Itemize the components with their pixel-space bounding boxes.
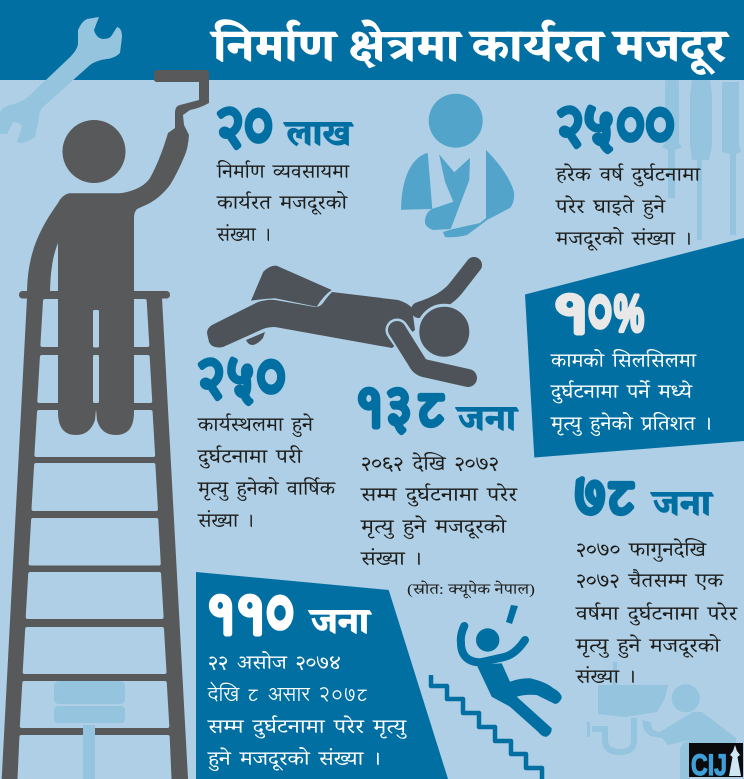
stat: 20 lakh: निर्माण व्यवसायमा bbox=[216, 159, 350, 183]
stat: 138 people: जना bbox=[455, 398, 519, 438]
stat: 138 people bbox=[353, 379, 519, 570]
stat: 20 lakh: लाख bbox=[283, 113, 354, 153]
stat: 110 people: सम्म दुर्घटनामा परेर मृत्यु bbox=[207, 714, 407, 740]
stat: 110 people: हुने मजदूरको संख्या । bbox=[207, 746, 381, 771]
stat: 250 bbox=[195, 338, 337, 532]
leg gap details bbox=[93, 310, 99, 403]
icon: fallen worker bbox=[207, 265, 474, 378]
icon: falling worker bbox=[431, 605, 562, 779]
stat: 250: ० bbox=[254, 338, 288, 412]
stat: 20 lakh: संख्या । bbox=[216, 223, 271, 246]
icon: paint roller bbox=[54, 681, 125, 779]
stat: 10 percent: % bbox=[614, 285, 644, 343]
stat: 110 people: देखि ८ असार २०७८ bbox=[207, 681, 369, 706]
stat: 250: संख्या । bbox=[197, 509, 254, 532]
stat: 250: कार्यस्थलमा हुने bbox=[197, 412, 315, 437]
stat: 78 people: संख्या । bbox=[575, 665, 636, 688]
fallen worker head bbox=[418, 305, 471, 358]
stat: 10 percent bbox=[549, 273, 712, 437]
stat: 250: दुर्घटनामा परी bbox=[197, 445, 303, 469]
stat: 250: मृत्यु हुनेको वार्षिक bbox=[197, 476, 337, 502]
icon: painter bbox=[27, 70, 209, 435]
stat: 138 people: ३ bbox=[383, 379, 414, 437]
stat: 10 percent: १ bbox=[549, 285, 591, 343]
stat: 2500: ५ bbox=[582, 98, 617, 156]
painter head bbox=[62, 120, 126, 183]
stairs bbox=[431, 675, 542, 779]
stat: 78 people bbox=[573, 467, 739, 688]
stat: 110 people: ० bbox=[264, 574, 296, 648]
stat: 138 people: २०६२ देखि २०७२ bbox=[361, 451, 499, 475]
header banner bbox=[0, 0, 744, 80]
stat: 2500: ० bbox=[643, 86, 677, 160]
stat: 78 people: २०७२ चैतसम्म एक bbox=[576, 568, 725, 592]
painter body and roller bbox=[27, 70, 209, 298]
icon: screwdrivers bbox=[662, 80, 741, 240]
stat: 110 people bbox=[204, 574, 407, 771]
stat: 250: ५ bbox=[225, 350, 257, 408]
stat: 2500: ० bbox=[614, 86, 647, 160]
stat: 2500 bbox=[554, 86, 701, 251]
title: निर्माण क्षेत्रमा कार्यरत मजदूर bbox=[210, 19, 729, 75]
stat: 138 people: १ bbox=[353, 379, 385, 437]
stat: 10 percent: ० bbox=[586, 273, 614, 347]
stat: 78 people: जना bbox=[650, 483, 714, 523]
stat: 250: २ bbox=[195, 350, 226, 408]
stat: 78 people: ७ bbox=[573, 467, 607, 525]
panel: 10 percent bbox=[525, 238, 744, 458]
stat: 138 people: ८ bbox=[417, 379, 448, 437]
stat: 20 lakh: ० bbox=[242, 87, 275, 161]
stat: 138 people: सम्म दुर्घटनामा परेर bbox=[360, 482, 519, 507]
stat: 138 people: मृत्यु हुने मजदूरको bbox=[360, 514, 507, 540]
stat: 10 percent: कामको सिलसिलमा bbox=[550, 348, 697, 372]
stat: 138 people: संख्या । bbox=[360, 547, 422, 570]
stat: 20 lakh bbox=[214, 87, 354, 246]
stat: 2500: २ bbox=[554, 98, 585, 156]
stat: 78 people: २०७० फागुनदेखि bbox=[576, 537, 707, 563]
source note: (स्रोत: क्यूपेक नेपाल) bbox=[407, 580, 535, 599]
stat: 20 lakh: २ bbox=[214, 99, 245, 157]
arm gap bbox=[397, 330, 418, 360]
stat: 78 people: मृत्यु हुने मजदूरको bbox=[575, 633, 721, 659]
icon: plumber bbox=[587, 662, 736, 779]
painter legs bbox=[58, 296, 134, 435]
panel: 110 people bbox=[196, 572, 448, 779]
stat: 110 people: २२ असोज २०७४ bbox=[208, 650, 341, 674]
stat: 20 lakh: कार्यरत मजदूरको bbox=[216, 190, 348, 215]
stat: 10 percent: दुर्घटनामा पर्ने मध्ये bbox=[550, 379, 693, 404]
stat: 78 people: ८ bbox=[607, 467, 638, 525]
stat: 2500: मजदूरको संख्या । bbox=[555, 226, 692, 251]
icon: ladder bbox=[2, 291, 188, 779]
stat: 2500: हरेक वर्ष दुर्घटनामा bbox=[555, 162, 701, 187]
stat: 10 percent: मृत्यु हुनेको प्रतिशत । bbox=[550, 411, 712, 437]
stat: 2500: परेर घाइते हुने bbox=[555, 194, 667, 219]
stat: 110 people: जना bbox=[308, 601, 372, 641]
stat: 78 people: वर्षमा दुर्घटनामा परेर bbox=[575, 601, 739, 626]
icon: person with arm sling bbox=[401, 94, 514, 237]
stat: 110 people: १ bbox=[204, 586, 237, 644]
icon: wrench bbox=[0, 17, 122, 143]
stat: 110 people: १ bbox=[233, 586, 267, 644]
exclamation mark bbox=[506, 605, 518, 624]
